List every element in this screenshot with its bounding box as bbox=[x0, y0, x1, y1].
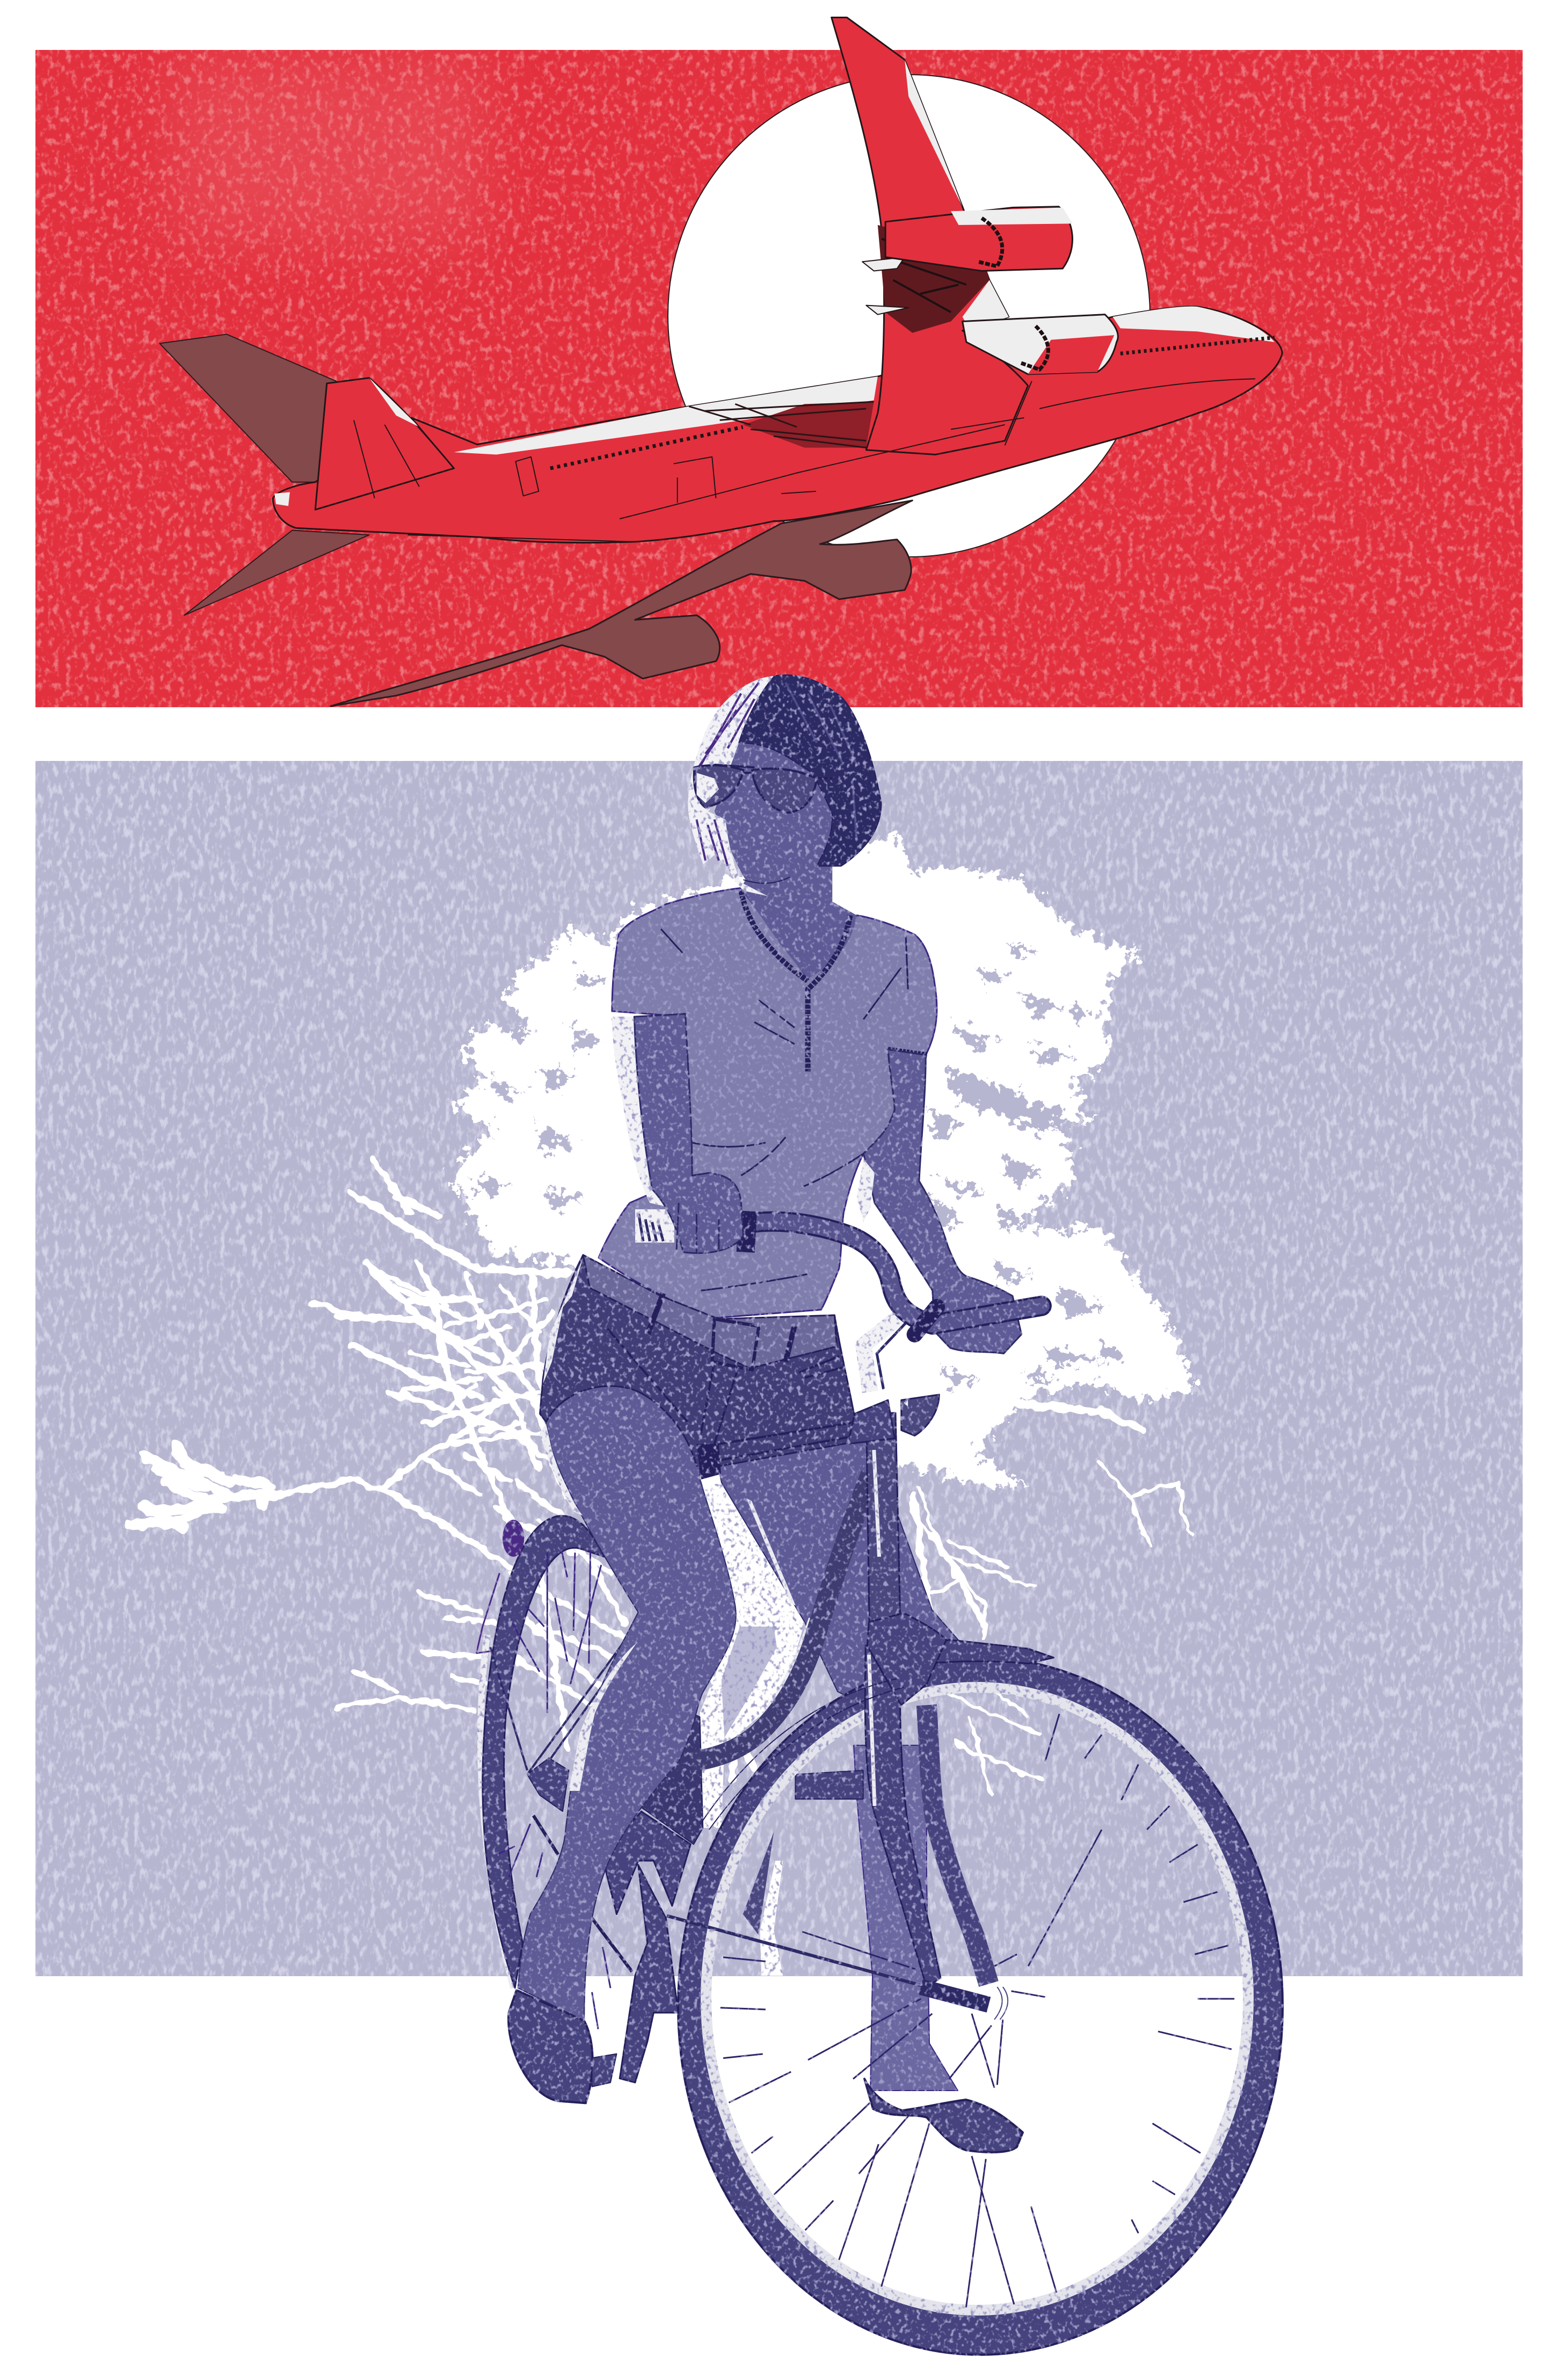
fuselage wing shadow bbox=[743, 402, 874, 448]
fuselage white highlight bbox=[454, 376, 878, 454]
illustration: white tree branches bbox=[133, 1160, 1193, 1795]
far lower leg bbox=[854, 1745, 958, 2091]
window row rear bbox=[550, 427, 743, 468]
hair strands on the left bbox=[696, 683, 759, 866]
neck and face bbox=[715, 743, 857, 978]
sleeve bands bbox=[612, 1015, 927, 1055]
dark bob hair bbox=[739, 675, 881, 866]
upper engine highlight bbox=[951, 207, 1073, 225]
grip collar bbox=[746, 1211, 748, 1252]
fork highlight bbox=[869, 1655, 875, 1806]
shorts crotch shadow bbox=[696, 1444, 721, 1479]
finger lines bbox=[676, 1203, 719, 1252]
front tyre bbox=[678, 1658, 1283, 2355]
sprocket band bbox=[605, 1811, 690, 1914]
far wing and engines in shadow bbox=[331, 500, 912, 706]
rear tyre bbox=[483, 1515, 605, 1988]
front rim bbox=[706, 1687, 1248, 2310]
chin line bbox=[743, 877, 790, 883]
belt loops bbox=[647, 1293, 795, 1362]
shirt details bbox=[612, 891, 927, 1290]
far left foliage cluster bbox=[133, 1447, 273, 1528]
curved top tube bbox=[690, 1475, 871, 1762]
illustration: white tree crown bbox=[453, 835, 1197, 1521]
lens reflection bbox=[696, 773, 719, 803]
tree crown bbox=[453, 835, 1197, 1521]
far arm bbox=[863, 1049, 1022, 1353]
belt buckle bbox=[712, 1319, 759, 1370]
left lens bbox=[694, 765, 743, 808]
belt bbox=[583, 1255, 837, 1368]
rear mudguard clip bbox=[503, 1520, 524, 1557]
torso in t-shirt bbox=[583, 743, 937, 1370]
lilac patch seen between the legs bbox=[722, 1627, 777, 1738]
collar band bbox=[741, 891, 850, 1071]
upper left branches bbox=[312, 1160, 567, 1521]
white gap between the legs bbox=[700, 1483, 805, 1976]
stem outline bbox=[877, 1320, 908, 1389]
cross tube bbox=[795, 1771, 863, 1799]
upper engine fan ring bbox=[978, 218, 1002, 266]
handlebar clamp bbox=[915, 1307, 937, 1334]
tail cone highlight bbox=[274, 492, 290, 506]
fin panel lines bbox=[354, 418, 454, 498]
lower stabilizer in shadow bbox=[184, 531, 369, 615]
window row front bbox=[1121, 337, 1275, 353]
far thigh bbox=[709, 1418, 961, 1708]
bridge and temple bbox=[715, 765, 832, 779]
near leg bbox=[508, 1368, 736, 2103]
branch mesh left of the rider bbox=[337, 1261, 632, 1717]
curved top tube highlight bbox=[723, 1619, 811, 1746]
bicycle lamp bbox=[901, 1395, 939, 1436]
illustration: airliner bbox=[159, 17, 1282, 706]
shorts creases bbox=[608, 1329, 857, 1460]
lamp highlight bbox=[904, 1400, 908, 1406]
mudguard rear blade bbox=[927, 1705, 988, 1984]
right lens bbox=[752, 768, 817, 813]
far shoe bbox=[864, 2079, 1023, 2152]
nose highlight bbox=[1112, 307, 1275, 342]
sunglasses bbox=[694, 765, 832, 813]
near thigh edge highlight bbox=[540, 1424, 583, 1515]
inner engine bbox=[963, 315, 1118, 374]
rear wheel bbox=[476, 1515, 638, 2029]
thin twigs on the right bbox=[920, 1463, 1193, 1795]
stay rod bbox=[667, 1915, 927, 1987]
wing leading edge highlight bbox=[905, 60, 963, 207]
flap fairing lower bbox=[866, 306, 908, 315]
mudguard lines bbox=[701, 1678, 904, 1830]
shirt folds bbox=[661, 929, 908, 1290]
fuselage panel lines bbox=[408, 379, 1255, 542]
near arm white highlight bbox=[612, 1017, 674, 1208]
handlebar outline bbox=[741, 1222, 1042, 1324]
white shadow on the face and neck bbox=[708, 811, 768, 896]
hatch shading on the fuselage bbox=[689, 402, 874, 448]
panel: red sky background bbox=[35, 50, 1523, 707]
hub spring rings bbox=[994, 1987, 1008, 2020]
chain lines bbox=[534, 1816, 632, 1972]
head tube highlight bbox=[874, 1450, 879, 1557]
far arm highlight bbox=[857, 1159, 875, 1222]
upper engine bbox=[885, 207, 1072, 271]
lower frame tube bbox=[743, 1832, 774, 1935]
arms and handlebar bbox=[612, 1014, 1042, 1444]
crank and pedal arm bbox=[620, 1865, 678, 2082]
hair shine strands bbox=[785, 683, 857, 841]
rear wheel outer rim bbox=[481, 1635, 513, 1988]
grip hatching bbox=[639, 1214, 663, 1241]
rear axle plate bbox=[527, 1758, 569, 1811]
wing hatch lines bbox=[882, 239, 974, 312]
shorts side highlight bbox=[543, 1258, 583, 1384]
front spokes bbox=[721, 1714, 1234, 2308]
bicycle frame bbox=[605, 1413, 900, 2082]
handlebar grip white end bbox=[635, 1209, 674, 1243]
wing dark shadow bbox=[878, 225, 990, 333]
hair and head bbox=[688, 675, 881, 883]
flap fairing upper bbox=[862, 257, 905, 271]
fuselage bbox=[273, 307, 1282, 543]
stem bbox=[863, 1315, 901, 1392]
inner engine fan ring bbox=[1020, 326, 1048, 369]
hair light side bbox=[688, 676, 774, 877]
tree trunk sliver below the frame bbox=[760, 1861, 783, 1976]
vertical tail fin bbox=[315, 378, 454, 510]
gaps in the foliage bbox=[474, 942, 1128, 1388]
seat tube bbox=[641, 1713, 703, 1844]
fork crown bbox=[867, 1613, 947, 1705]
rear spokes bbox=[497, 1549, 610, 2029]
main wing bbox=[832, 17, 1028, 454]
near shoe bbox=[508, 1990, 593, 2103]
far thigh white strip bbox=[746, 1498, 796, 1606]
fork blade bbox=[865, 1628, 941, 1987]
rear mudguard bracket bbox=[476, 1573, 499, 1653]
near arm and hand bbox=[634, 1014, 743, 1253]
wheel hub bbox=[921, 1987, 988, 2005]
stem collar bbox=[848, 1400, 894, 1444]
near leg white highlight bbox=[569, 1643, 637, 1791]
trunk twigs behind the frame bbox=[517, 1496, 985, 1782]
head tube bbox=[866, 1413, 900, 1622]
far left branch bbox=[273, 1479, 510, 1567]
wing root highlight bbox=[963, 280, 1009, 331]
rear stays bbox=[490, 1627, 638, 1779]
toe beyond the shoe bbox=[592, 2054, 616, 2087]
shorts bbox=[540, 1255, 859, 1479]
far tail fin in shadow bbox=[159, 334, 336, 482]
right branches bbox=[898, 1404, 1143, 1463]
front fork and mudguard bbox=[667, 1613, 1053, 2020]
illustration: cyclist on bicycle bbox=[476, 675, 1283, 2355]
mudguard top bbox=[921, 1640, 1053, 1664]
inner engine red lower bbox=[1028, 335, 1114, 374]
front wheel bbox=[678, 1658, 1283, 2355]
tail fin white highlight bbox=[369, 378, 419, 427]
white sun circle bbox=[668, 75, 1150, 557]
panel: lilac background bbox=[35, 761, 1523, 1976]
handlebar tube bbox=[741, 1222, 1042, 1324]
